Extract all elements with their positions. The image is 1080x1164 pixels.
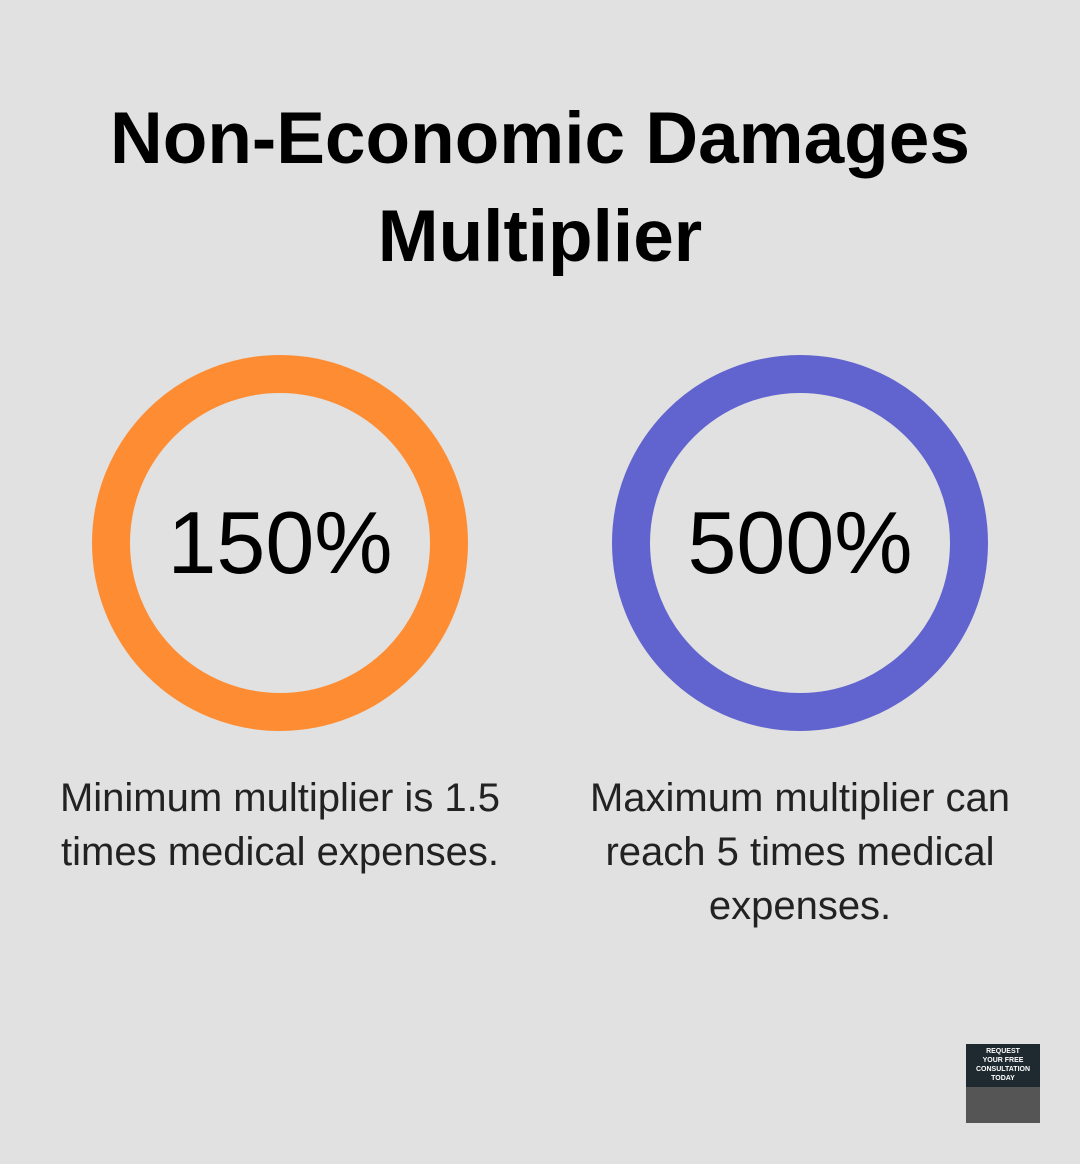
logo badge: [966, 1044, 1040, 1123]
logo badge: REQUEST: [986, 1048, 1020, 1055]
ring: 150%: 150%: [167, 493, 393, 592]
caption right: Maximum multiplier can reach 5 times medical expenses.: [590, 776, 1010, 928]
title: Multiplier: [378, 196, 702, 277]
ring: 500%: 500%: [687, 493, 913, 592]
ring: 500%: [612, 355, 988, 731]
title: [110, 98, 970, 277]
ring: 150%: [92, 355, 468, 731]
title: Non-Economic Damages: [110, 98, 970, 179]
logo badge: TODAY: [991, 1075, 1015, 1082]
logo badge: YOUR FREE: [983, 1057, 1023, 1064]
logo badge: CONSULTATION: [976, 1066, 1030, 1073]
caption left: Minimum multiplier is 1.5 times medical expenses.: [60, 776, 500, 874]
